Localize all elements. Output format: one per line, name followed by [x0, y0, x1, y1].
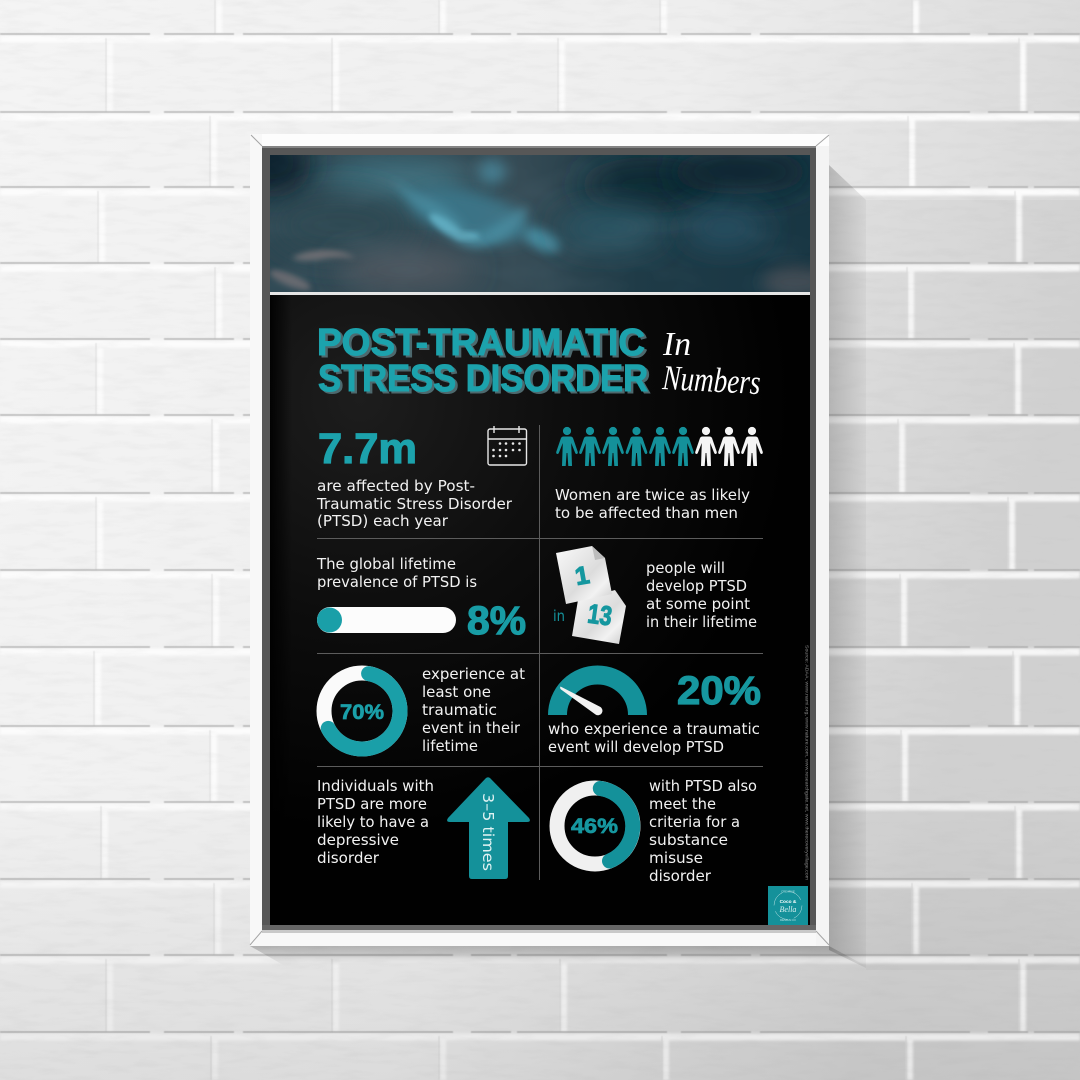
text: who experience a traumatic event: who experience a traumatic — [548, 720, 760, 738]
text: experience traumatic event: traumatic — [422, 701, 497, 719]
text: global lifetime prevalence: prevalence of PTSD is — [317, 573, 477, 591]
progress bar: 8% — [317, 607, 456, 633]
text: people will develop PTSD — [646, 559, 757, 631]
text: substance misuse disorder: misuse — [649, 849, 703, 867]
stat: 7.7m affected: are affected by Post- — [317, 477, 475, 495]
poster storm sky image — [270, 155, 810, 292]
subtitle: In Numbers: Numbers — [661, 358, 761, 402]
logo: Coco and Bella: DESIGN CO — [780, 918, 797, 922]
icon: paper sheets 1 in 13: 13 — [586, 598, 614, 632]
text: substance misuse disorder: disorder — [649, 867, 712, 885]
logo: Coco and Bella — [768, 886, 808, 925]
stat: 8%: 8% — [467, 599, 526, 643]
text: individuals depressive disorder: PTSD are more — [317, 795, 427, 813]
text: substance misuse disorder: criteria for a — [649, 813, 740, 831]
gauge: 20% — [558, 675, 638, 715]
text: individuals depressive disorder: likely to have a — [317, 813, 429, 831]
text: experience traumatic event: least one — [422, 683, 491, 701]
subtitle: In Numbers: In — [662, 326, 691, 363]
donut chart: 70% — [324, 673, 400, 749]
text: individuals depressive disorder — [317, 777, 434, 867]
source note: Source: ADAA, www.nami.org, www.nature.com, www.researchgate.net, www.therecoveryvillage.com — [804, 645, 810, 880]
text: substance misuse disorder: substance — [649, 831, 728, 849]
donut chart: 70%: 70% — [340, 701, 384, 724]
title: STRESS DISORDER — [320, 360, 650, 402]
text: women twice as likely: Women are twice as likely — [555, 486, 750, 504]
text: who experience a traumatic event — [548, 720, 760, 756]
text: substance misuse disorder: meet the — [649, 795, 716, 813]
pictogram: people, six teal and three white — [556, 427, 763, 466]
text: individuals depressive disorder: depressive — [317, 831, 399, 849]
title: POST-TRAUMATIC — [320, 324, 648, 366]
poster dark panel — [270, 295, 810, 925]
text: people will develop PTSD: develop PTSD — [646, 577, 747, 595]
text: substance misuse disorder — [649, 777, 757, 885]
logo: Coco and Bella: CREATIVE — [781, 890, 795, 894]
text: women twice as likely — [555, 486, 750, 522]
text: people will develop PTSD: people will — [646, 559, 725, 577]
text: experience traumatic event: event in their — [422, 719, 521, 737]
donut chart: 46%: 46% — [571, 815, 618, 838]
text: experience traumatic event: lifetime — [422, 737, 478, 755]
stat: 7.7m affected: Traumatic Stress Disorder — [316, 495, 513, 513]
white poster frame — [250, 134, 829, 946]
stat: 7.7m affected: (PTSD) each year — [317, 512, 449, 530]
text: experience traumatic event — [422, 665, 525, 755]
icon: paper sheets 1 in 13: 1 — [573, 561, 592, 591]
text: people will develop PTSD: at some point — [646, 595, 750, 613]
logo: Coco and Bella: Coco & — [780, 899, 797, 905]
title: STRESS DISORDER — [318, 358, 648, 400]
text: experience traumatic event: experience at — [422, 665, 525, 683]
subtitle: In Numbers — [661, 326, 761, 402]
dividers — [317, 425, 763, 880]
stat: 7.7m affected: 7.7m — [318, 425, 417, 473]
text: individuals depressive disorder: disorder — [317, 849, 380, 867]
text: individuals depressive disorder: Individuals with — [317, 777, 434, 795]
arrow: 3-5 times — [447, 777, 530, 879]
donut chart: 46% — [557, 788, 633, 864]
stat: 20%: 20% — [677, 669, 761, 713]
icon: paper sheets 1 in 13: in — [553, 607, 565, 625]
icon: calendar — [488, 426, 526, 465]
title: POST-TRAUMATIC — [317, 322, 645, 364]
arrow: 3-5 times: 3–5 times — [479, 793, 497, 871]
text: people will develop PTSD: in their lifetime — [646, 613, 757, 631]
text: substance misuse disorder: with PTSD also — [649, 777, 757, 795]
white rule under sky — [270, 292, 810, 295]
text: global lifetime prevalence: The global lifetime — [316, 555, 456, 573]
frame shadow on wall — [250, 165, 1080, 970]
text: women twice as likely: to be affected than men — [555, 504, 738, 522]
stat: 7.7m affected — [316, 425, 513, 530]
icon: paper sheets 1 in 13 — [553, 546, 626, 644]
text: global lifetime prevalence — [316, 555, 477, 591]
text: who experience a traumatic event: event will develop PTSD — [548, 738, 724, 756]
logo: Coco and Bella: Bella — [780, 905, 796, 914]
title — [317, 322, 650, 402]
